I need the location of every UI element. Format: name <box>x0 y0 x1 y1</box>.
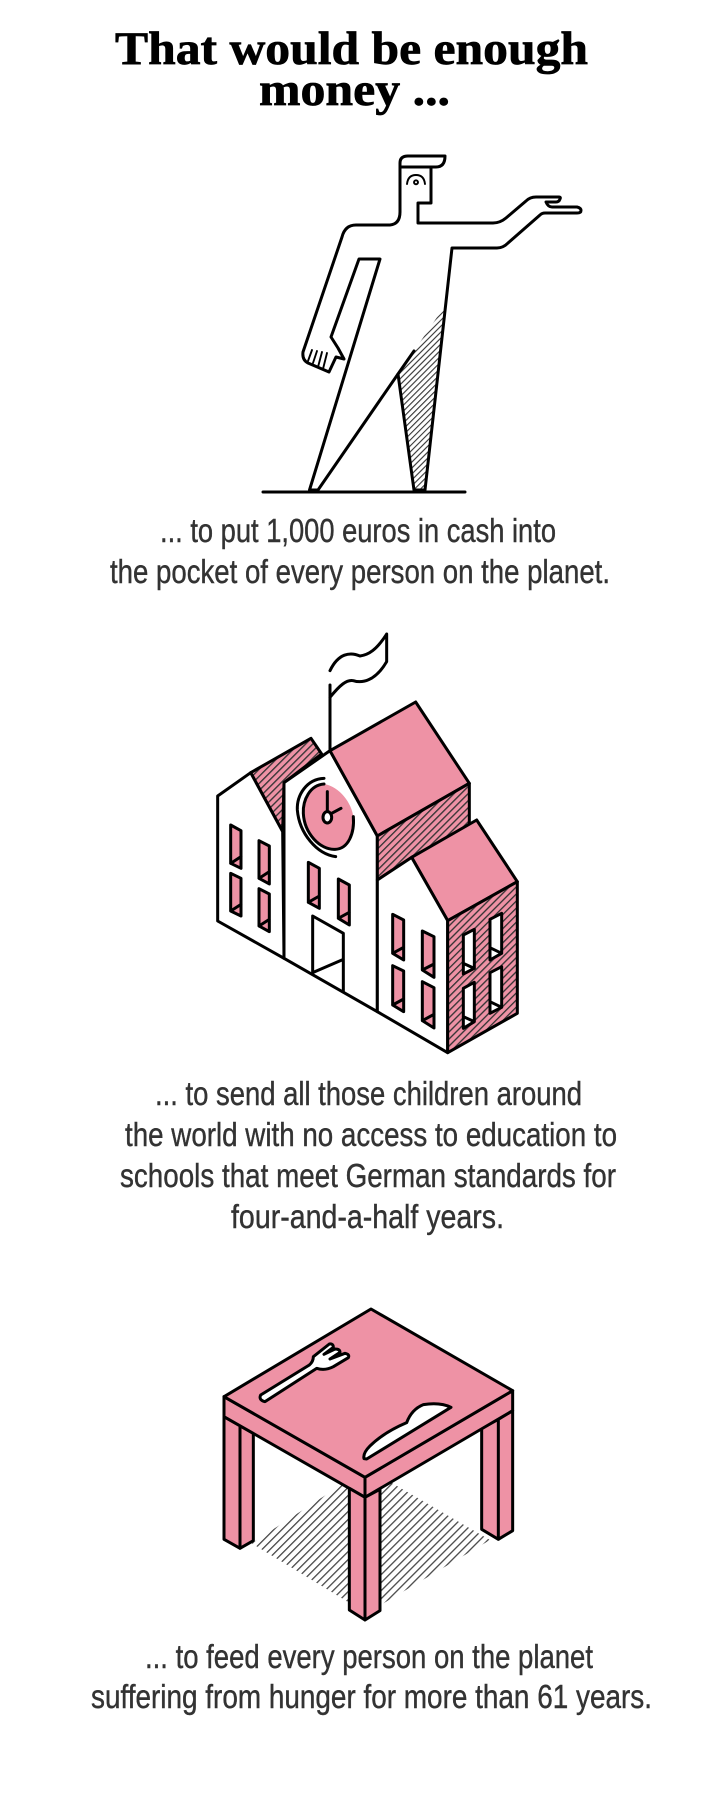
table top <box>224 1309 513 1477</box>
caption: education: schools that meet German standards for <box>120 1157 616 1194</box>
body outline <box>303 167 581 490</box>
icon: man holding out his hand <box>263 156 581 492</box>
clock <box>297 778 354 857</box>
caption: education <box>120 1075 617 1235</box>
hatched shadow on the leg <box>398 304 446 490</box>
caption: cash: ... to put 1,000 euros in cash into <box>160 512 556 549</box>
table edge <box>224 1391 513 1497</box>
main roof <box>330 702 469 836</box>
thigh line <box>398 351 414 374</box>
caption: cash: the pocket of every person on the planet. <box>110 553 610 590</box>
caption: education: four-and-a-half years. <box>231 1198 504 1235</box>
caption: education: the world with no access to education to <box>125 1116 617 1153</box>
right roof <box>412 820 517 921</box>
icon: school building <box>218 634 517 1053</box>
right side wall <box>448 882 517 1053</box>
knife <box>364 1404 451 1459</box>
hair <box>400 156 445 167</box>
title: That would be enough <box>115 23 588 75</box>
ground line <box>263 490 465 494</box>
caption: hunger <box>91 1638 652 1715</box>
pink windows <box>231 825 434 1028</box>
fork <box>260 1344 349 1402</box>
right house front <box>377 857 448 1053</box>
title <box>115 23 588 116</box>
hatched floor shadow <box>252 1468 490 1613</box>
caption: hunger: ... to feed every person on the planet <box>145 1638 593 1675</box>
white side windows <box>463 913 502 1028</box>
main side wall <box>377 783 469 880</box>
icon: table with cutlery <box>224 1309 513 1620</box>
flag <box>330 634 387 751</box>
centre house front <box>284 751 377 1012</box>
caption: education: ... to send all those children around <box>155 1075 582 1112</box>
back right leg <box>482 1411 513 1539</box>
caption: cash <box>110 512 610 590</box>
title: money ... <box>259 64 450 116</box>
door <box>313 916 343 992</box>
fingers <box>308 350 327 369</box>
rear hatched roof <box>251 738 322 832</box>
left house front <box>218 773 284 958</box>
eye <box>407 175 425 184</box>
left leg <box>224 1417 253 1548</box>
centre leg <box>349 1488 380 1620</box>
